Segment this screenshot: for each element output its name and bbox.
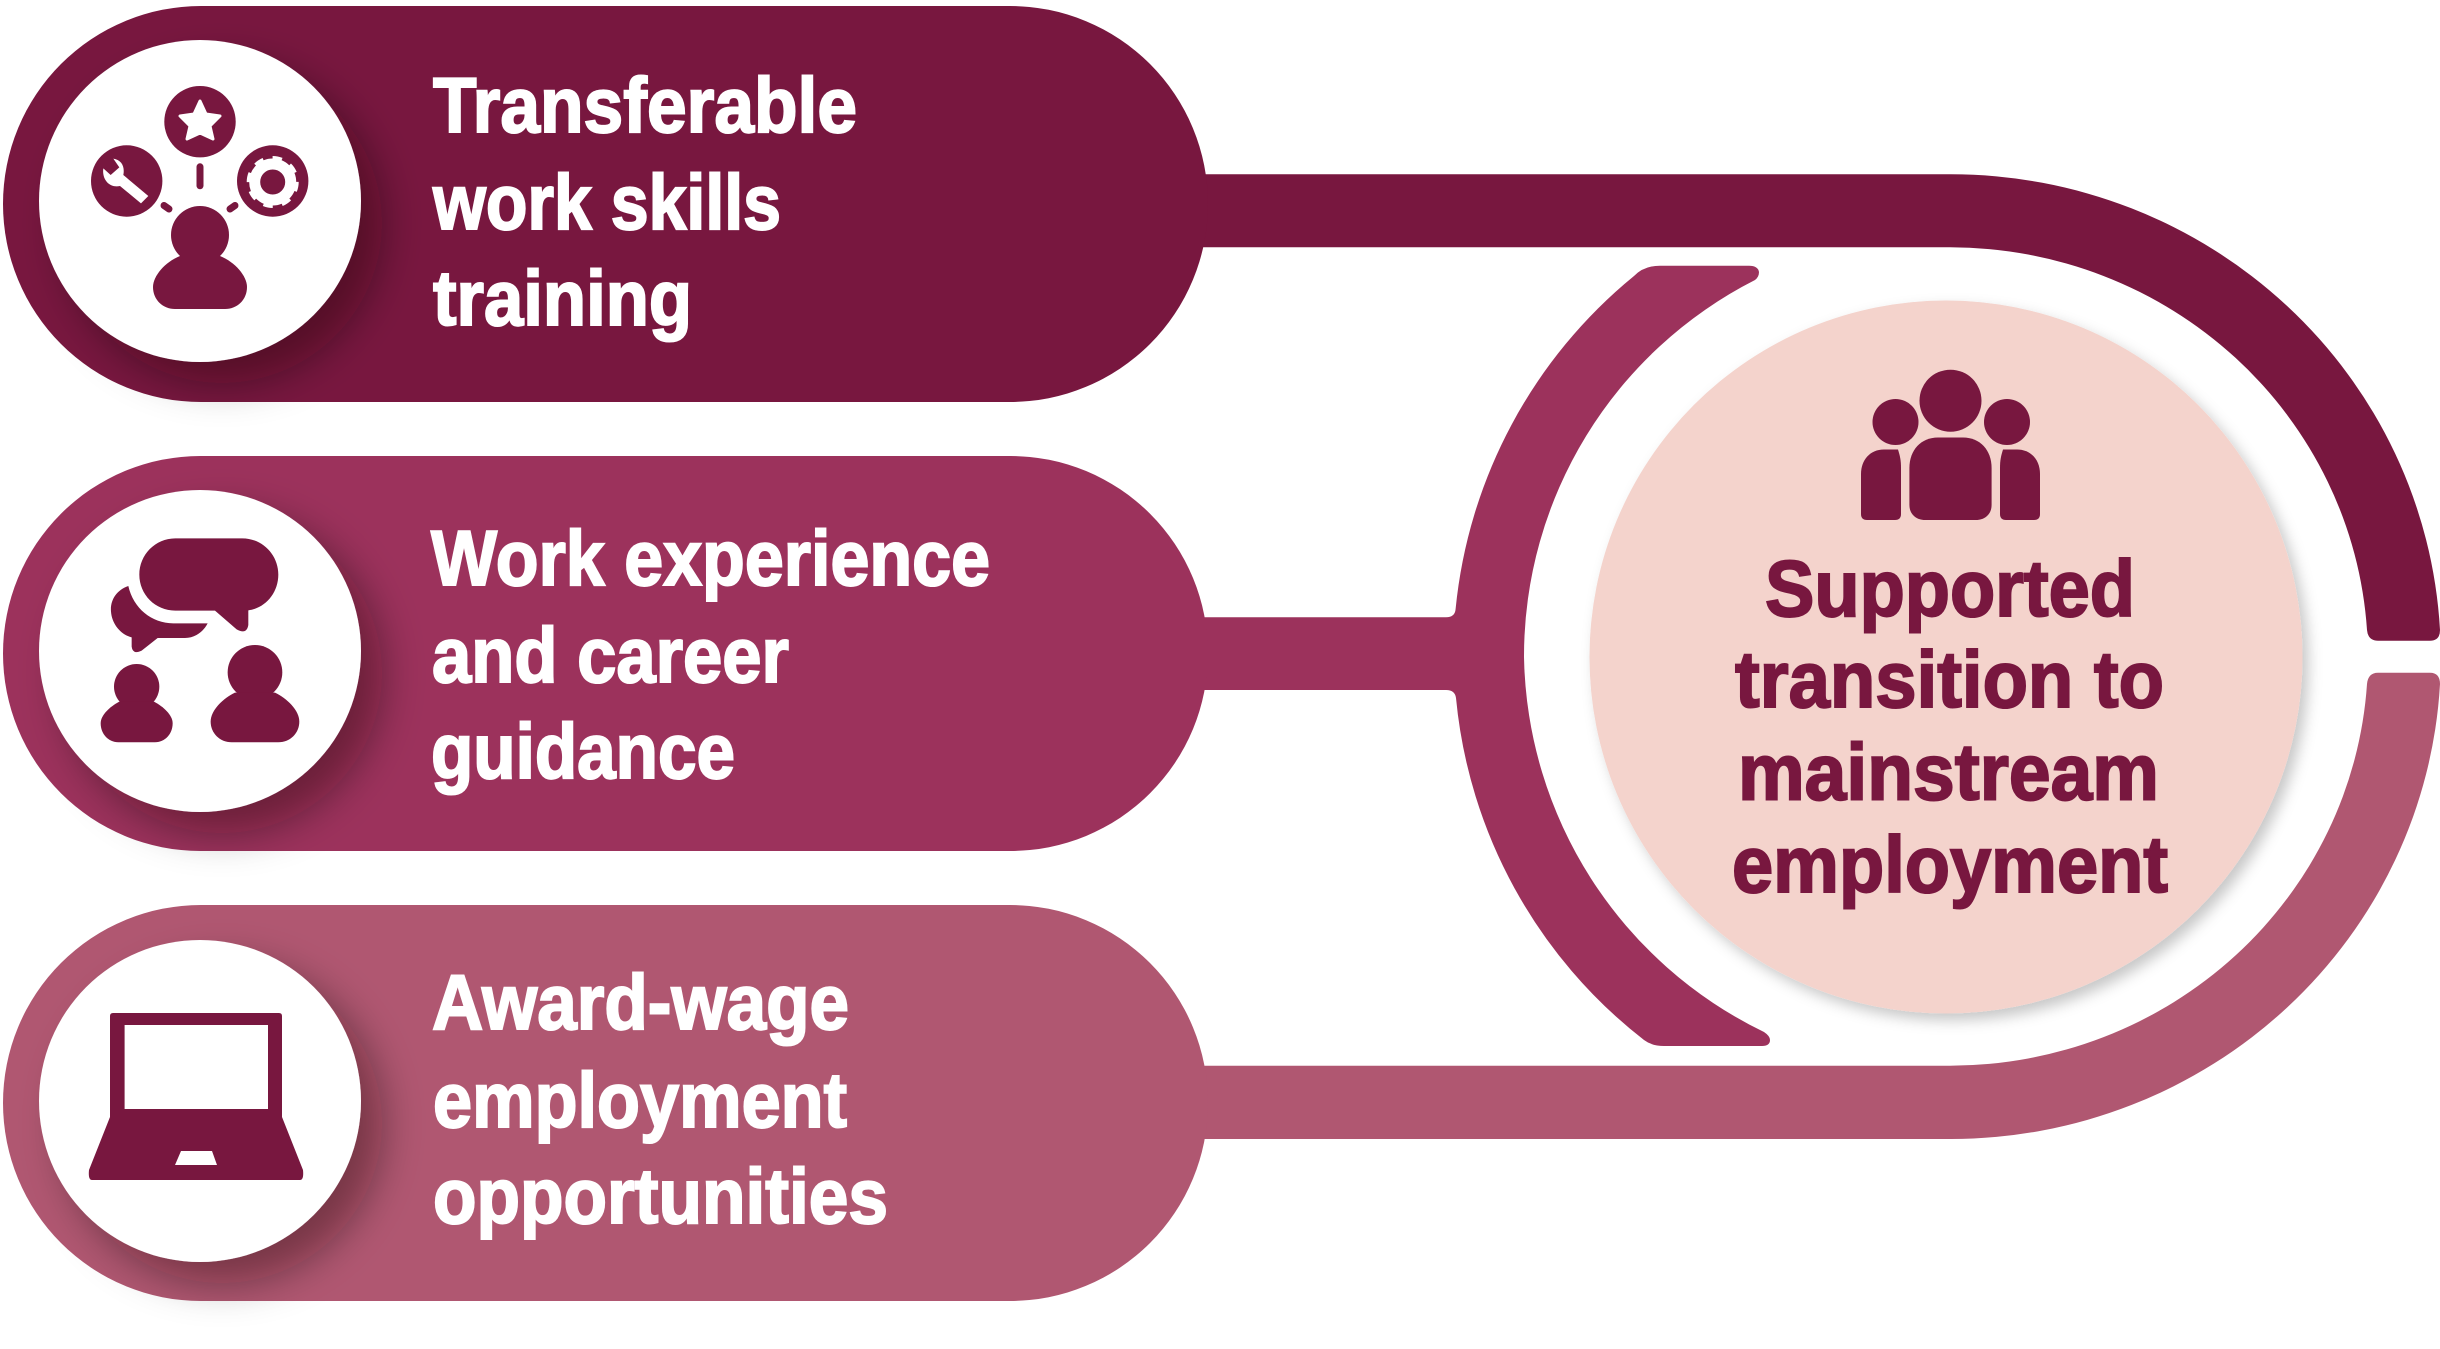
heading: Supported xyxy=(1765,544,2135,633)
heading: employment xyxy=(1732,820,2168,909)
pink circle xyxy=(1590,300,2302,1014)
icon: two people talking xyxy=(101,538,299,742)
white icon circle xyxy=(39,940,361,1262)
icon: person with skills xyxy=(91,86,308,309)
heading: guidance xyxy=(431,707,735,795)
white icon circle xyxy=(39,490,361,812)
heading: training xyxy=(433,254,692,342)
connector arc: middle C-shaped band around centre xyxy=(1000,266,1770,1046)
heading: work skills xyxy=(432,158,781,246)
pill background xyxy=(3,456,1208,851)
pill background xyxy=(3,905,1208,1301)
heading: Transferable xyxy=(433,61,857,149)
panel: transferable work skills training xyxy=(3,6,1208,402)
heading xyxy=(432,61,857,342)
heading xyxy=(432,958,888,1240)
icon: laptop xyxy=(89,1013,303,1180)
heading: Award-wage xyxy=(432,958,849,1046)
heading xyxy=(1732,544,2168,909)
heading: Work experience xyxy=(431,514,990,602)
panel: award-wage employment opportunities xyxy=(3,905,1208,1301)
heading: employment xyxy=(433,1056,847,1144)
connector arc: bottom band from wage pill to centre xyxy=(1010,673,2440,1139)
heading: and career xyxy=(432,611,789,699)
white icon circle xyxy=(39,40,361,362)
heading: transition to xyxy=(1735,635,2164,724)
heading xyxy=(431,514,990,795)
heading: mainstream xyxy=(1738,728,2159,816)
icon: group of three people xyxy=(1861,370,2040,520)
heading: opportunities xyxy=(433,1152,888,1240)
connector arc: top band from skills pill to centre xyxy=(1010,174,2440,641)
pill background xyxy=(3,6,1208,402)
panel: supported transition outcome xyxy=(1590,300,2302,1014)
panel: work experience and career guidance xyxy=(3,456,1208,851)
